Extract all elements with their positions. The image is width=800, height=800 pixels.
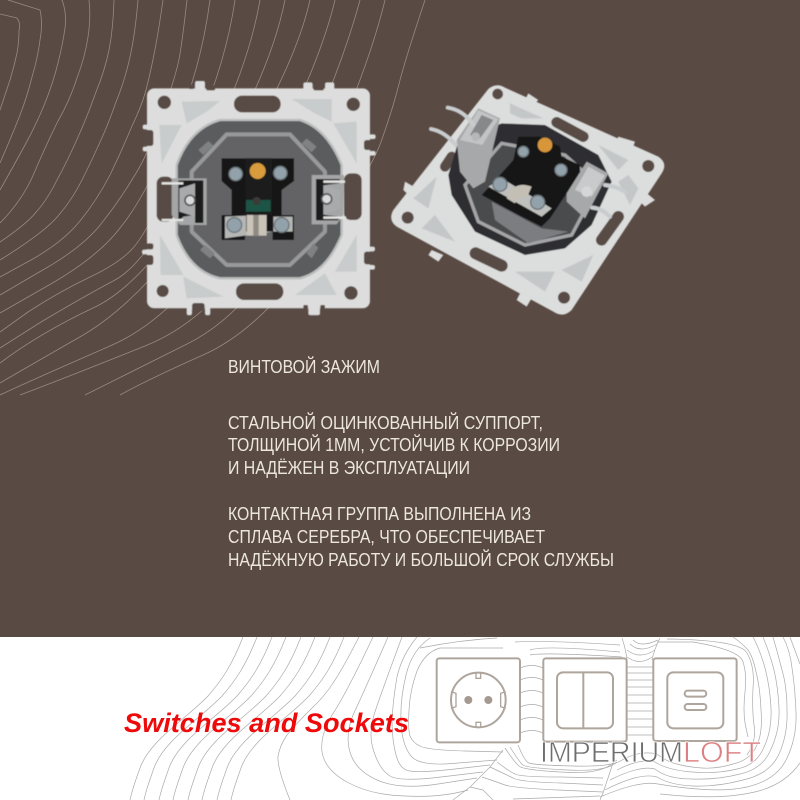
icon: socket — [437, 658, 520, 742]
product photo: socket angled view — [391, 85, 664, 315]
screws — [227, 166, 289, 232]
text block: contact group: КОНТАКТНАЯ ГРУППА ВЫПОЛНЕНА ИЗ — [228, 504, 531, 524]
text block: contact group: СПЛАВА СЕРЕБРА, ЧТО ОБЕСПЕЧИВАЕТ — [228, 527, 545, 547]
brass pin — [250, 163, 266, 179]
text block: steel support — [228, 412, 560, 478]
dark housing — [448, 123, 612, 255]
round housing — [177, 120, 342, 278]
text block: steel support: И НАДЁЖЕН В ЭКСПЛУАТАЦИИ — [228, 458, 470, 478]
plate recesses — [159, 99, 357, 298]
icon: USB outlet — [653, 658, 737, 741]
text block: steel support: ТОЛЩИНОЙ 1ММ, УСТОЙЧИВ К КОРРОЗИИ — [228, 434, 560, 455]
recesses — [413, 103, 638, 292]
brass pin — [538, 138, 552, 152]
icon: double switch — [543, 658, 627, 742]
side terminals — [172, 178, 207, 225]
panel: white footer — [0, 637, 800, 800]
plate — [391, 85, 664, 315]
black block — [482, 137, 580, 227]
text block: steel support: СТАЛЬНОЙ ОЦИНКОВАННЫЙ СУППОРТ, — [228, 412, 543, 433]
right terminal — [567, 162, 608, 218]
logo: Imperium Loft: IMPERIUM — [540, 737, 683, 769]
text block: contact group: НАДЁЖНУЮ РАБОТУ И БОЛЬШОЙ СРОК СЛУЖБЫ — [228, 549, 614, 570]
clips — [431, 108, 626, 217]
logo: Imperium Loft — [540, 737, 761, 769]
left terminal — [457, 108, 500, 188]
panel: brown background — [0, 0, 800, 637]
clamp — [488, 178, 552, 217]
housing ribs — [198, 138, 318, 258]
screws — [493, 146, 567, 209]
contour lines on footer — [130, 637, 800, 800]
product photo: socket front view — [142, 81, 376, 315]
text block: screw clamp: ВИНТОВОЙ ЗАЖИМ — [228, 356, 380, 377]
plate holes and slots — [145, 84, 374, 311]
black terminal block — [222, 158, 294, 240]
logo: Imperium Loft: LOFT — [683, 737, 761, 769]
metal clamp — [225, 216, 293, 238]
text block: contact group — [228, 504, 614, 570]
heading: Switches and Sockets: Switches and Sockets — [124, 708, 409, 738]
contour lines on brown panel — [0, 0, 425, 395]
holes and slots — [402, 89, 654, 304]
plate — [142, 81, 376, 315]
